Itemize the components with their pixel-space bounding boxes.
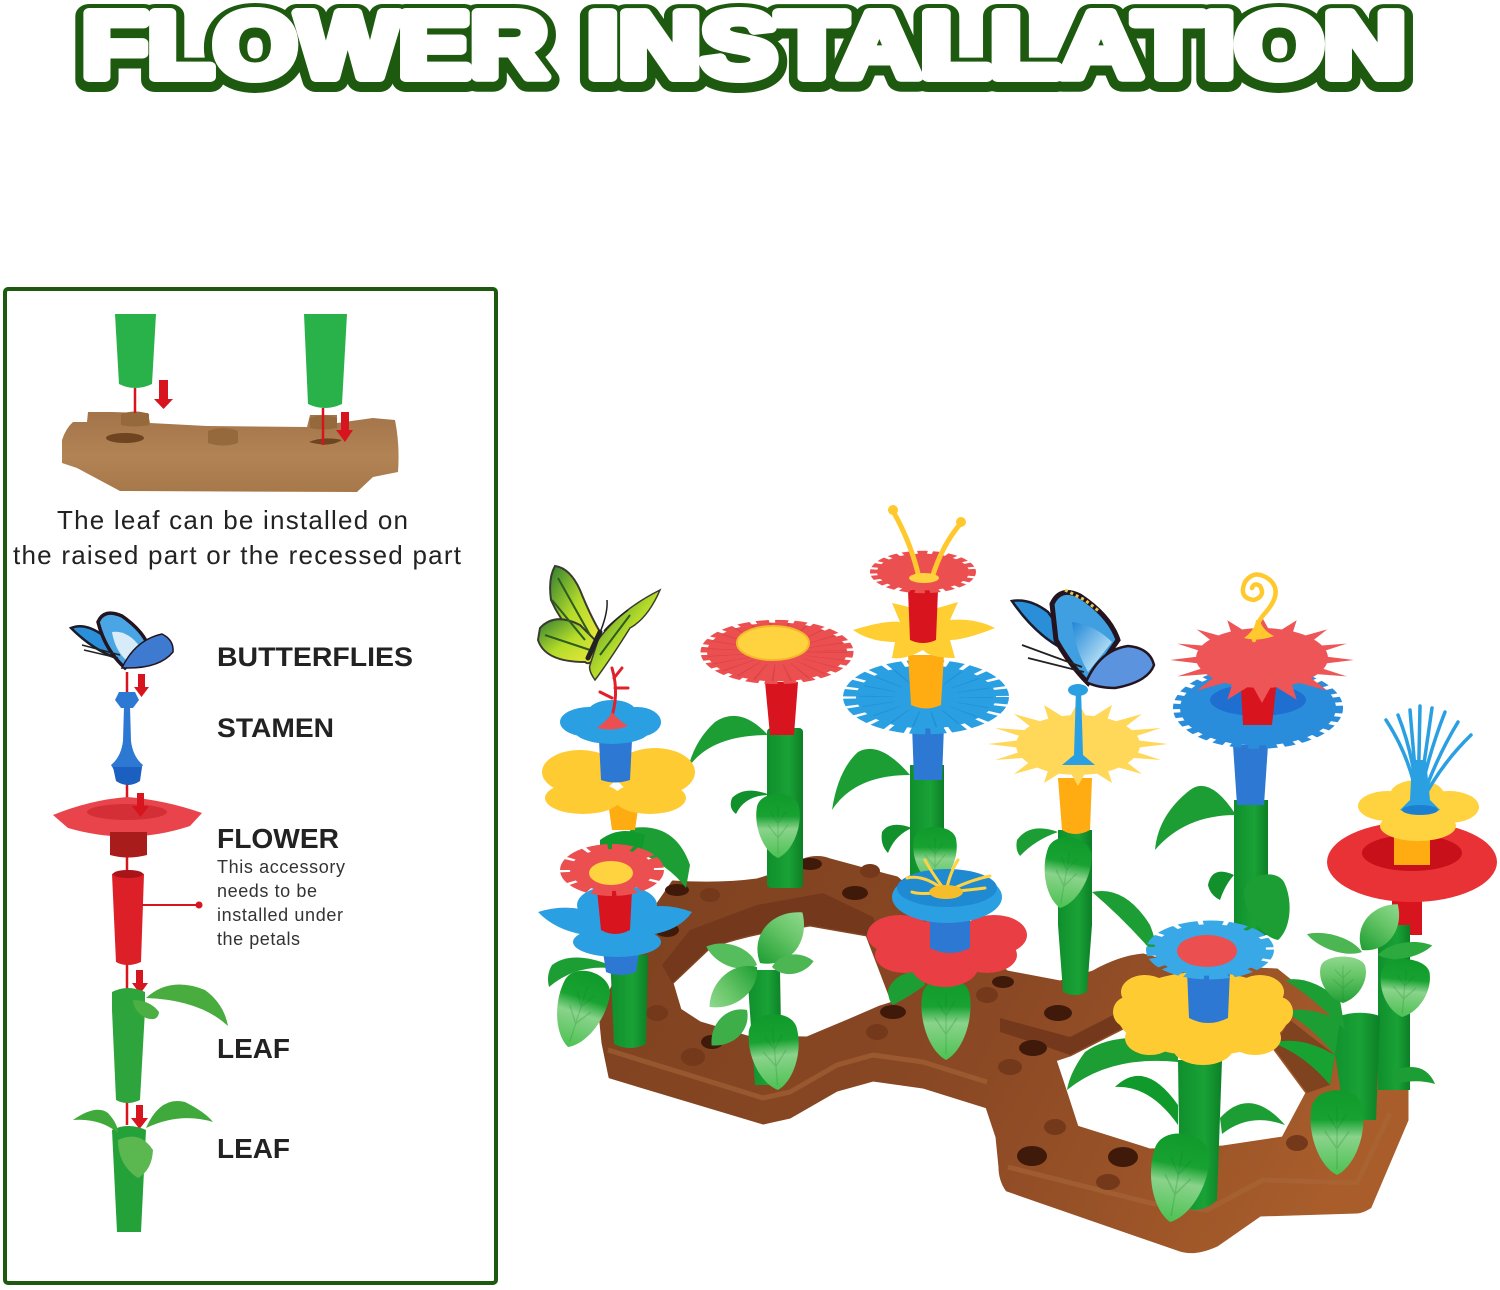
base pegs [646, 864, 1308, 1190]
icon: butterfly [71, 613, 173, 668]
blue top [892, 871, 1002, 923]
product illustration: flower garden [538, 505, 1497, 1252]
pointer line [142, 902, 202, 908]
leaves [688, 716, 800, 858]
flower note: the petals [217, 929, 300, 949]
flower: red and blue on left [538, 848, 692, 1055]
stem [1178, 1060, 1222, 1210]
centre [737, 626, 809, 660]
arrow [336, 412, 353, 442]
inner walls [662, 893, 1335, 1093]
blue bell [1177, 669, 1339, 747]
icon: stamen [111, 692, 143, 785]
red petals [867, 915, 1027, 987]
red guide line [126, 672, 128, 1125]
panel: installation steps [5, 289, 496, 1283]
caption: the raised part or the recessed part [13, 540, 462, 570]
blue petals [538, 885, 692, 957]
base holes [655, 858, 1138, 1167]
stem [1234, 800, 1268, 935]
label: leaf lower: LEAF [217, 1133, 290, 1164]
blue petals [560, 700, 661, 744]
stem [1058, 830, 1092, 995]
flower note: needs to be [217, 881, 317, 901]
leaves [1067, 1038, 1285, 1227]
red stamen [600, 668, 628, 722]
flower: yellow daisy with blue stamen [988, 684, 1168, 995]
flower note: installed under [217, 905, 343, 925]
title [82, 0, 1406, 100]
centre [1177, 935, 1237, 967]
ring [1327, 822, 1497, 902]
flower: blue top with yellow stamen and red petals [867, 860, 1027, 1060]
icon: red flower [53, 797, 202, 858]
yellow petals [1113, 972, 1293, 1065]
exploded assembly diagram [53, 613, 228, 1232]
yellow petals [853, 602, 995, 658]
orange stem [607, 795, 640, 830]
blue petals [850, 663, 1002, 731]
spiral stamen [1243, 574, 1276, 640]
blue stem [1187, 970, 1230, 1023]
leaves [888, 970, 971, 1060]
leaves [545, 958, 616, 1055]
label: butterflies: BUTTERFLIES [217, 642, 413, 672]
plant: leaves on right [1273, 895, 1435, 1175]
illustration: leaf stems inserted into base [62, 314, 399, 492]
stamen [1062, 688, 1095, 765]
icon: green butterfly [538, 566, 660, 680]
petals [988, 702, 1168, 786]
label: flower: FLOWER [217, 823, 339, 854]
arrow [134, 674, 149, 697]
flower: red and blue with spiral [1155, 574, 1354, 946]
flower note [217, 857, 345, 949]
leaves [1016, 828, 1156, 955]
antennae [893, 511, 961, 578]
blue stem [599, 740, 632, 782]
yellow petals [542, 748, 695, 814]
icon: blue butterfly [1012, 590, 1154, 688]
yellow stamen [907, 860, 990, 894]
leaves [1155, 786, 1299, 946]
red petals [1170, 617, 1354, 703]
centre [589, 861, 633, 885]
label: stamen: STAMEN [217, 713, 334, 743]
red top [874, 552, 972, 592]
flower: red ring with yellow flower [1327, 706, 1497, 935]
red petals [568, 848, 656, 892]
caption [13, 505, 462, 570]
flower: yellow and blue foreground [1067, 924, 1293, 1227]
panel border [5, 289, 496, 1283]
flower note: This accessory [217, 857, 345, 877]
leaves [600, 827, 690, 888]
arrow [132, 793, 149, 817]
leaves [832, 749, 957, 885]
garden base [600, 858, 1407, 1252]
arrow [131, 1105, 148, 1129]
yellow petals [1358, 780, 1479, 841]
flower: tower with antennae [832, 505, 1002, 885]
arrow [132, 970, 148, 994]
stem [910, 765, 944, 875]
arrow [154, 380, 173, 409]
caption: The leaf can be installed on [57, 505, 408, 535]
icon: upper leaf stem [112, 985, 228, 1103]
plant: small leaf cluster [700, 900, 817, 1092]
stem [767, 728, 803, 888]
icon: red tube [112, 870, 144, 965]
flower: blue and yellow with red stamen [542, 668, 695, 888]
blue stamen spray [1386, 706, 1471, 805]
stem [610, 955, 648, 1048]
blue stem [930, 915, 970, 953]
label: leaf upper: LEAF [217, 1033, 290, 1064]
flower: red daisy with yellow centre [688, 621, 850, 888]
icon: lower leaf stem [73, 1101, 213, 1232]
orange stem [1394, 830, 1430, 865]
petals [704, 621, 850, 683]
blue petals [1153, 924, 1267, 976]
